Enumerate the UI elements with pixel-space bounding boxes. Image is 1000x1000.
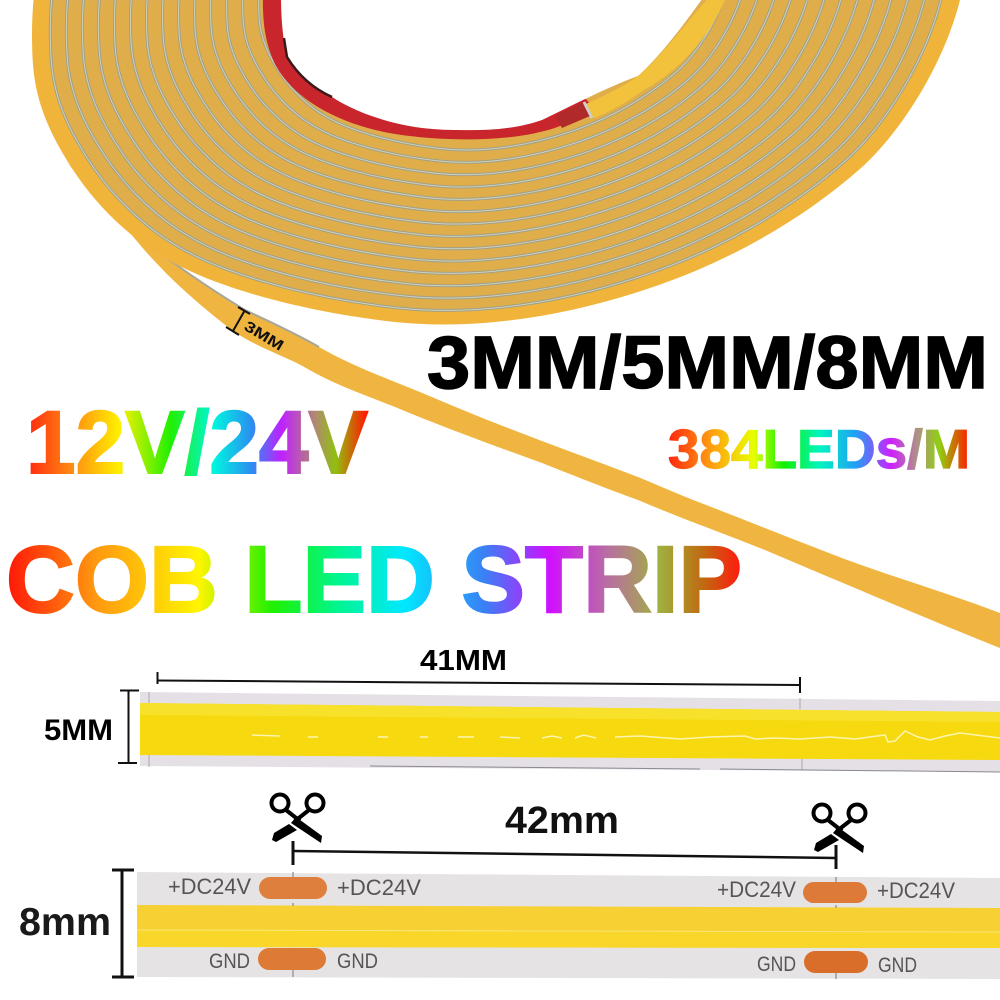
5mm strip photo xyxy=(140,692,1000,772)
pad labels: +DC24V xyxy=(877,878,955,903)
coiled LED strip reel xyxy=(32,0,962,325)
solder pads xyxy=(259,877,327,899)
42mm dimension label: 42mm xyxy=(505,800,619,842)
heading: voltage: 12V/24V xyxy=(26,392,368,492)
end of strip inside coil xyxy=(586,0,727,118)
pad labels: GND xyxy=(878,954,917,977)
yellow phosphor band xyxy=(140,703,1000,760)
pad labels: GND xyxy=(209,950,250,973)
heading: widths: 3MM/5MM/8MM xyxy=(427,321,988,404)
strip tail running to the bottom right xyxy=(64,160,1000,648)
pad labels: GND xyxy=(757,953,796,976)
strip silver edge xyxy=(160,253,319,347)
8mm strip photo xyxy=(137,872,1000,979)
8mm dimension label xyxy=(19,870,134,977)
reflection squiggle xyxy=(252,731,1000,742)
coil windings xyxy=(50,0,943,310)
3MM width marker: 3MM xyxy=(241,318,287,355)
42mm dimension label xyxy=(293,800,836,869)
red wire xyxy=(263,0,592,139)
41MM dimension label xyxy=(157,645,800,693)
pad labels xyxy=(168,874,955,977)
centre hole xyxy=(281,0,705,130)
pad labels: +DC24V xyxy=(168,874,251,899)
cut marks xyxy=(149,692,802,770)
pad labels: GND xyxy=(337,950,378,973)
5MM dimension label xyxy=(44,690,139,763)
wire shadow xyxy=(284,38,332,97)
8mm dimension label: 8mm xyxy=(19,901,111,944)
3MM width marker xyxy=(226,307,287,355)
41MM dimension label: 41MM xyxy=(420,645,507,677)
icon: scissors right xyxy=(814,804,866,853)
yellow phosphor band xyxy=(137,905,1000,948)
icon: scissors left xyxy=(272,794,324,843)
pad labels: +DC24V xyxy=(337,875,421,900)
cut marks xyxy=(293,872,836,979)
heading: LED density: 384LEDs/M xyxy=(668,418,970,480)
coil outer rim xyxy=(32,0,962,325)
5MM dimension label: 5MM xyxy=(44,714,113,747)
heat-shrink joint xyxy=(555,102,590,128)
pad labels: +DC24V xyxy=(717,877,796,902)
bottom edge line xyxy=(370,766,1000,772)
heading: product title: COB LED STRIP xyxy=(6,527,742,633)
